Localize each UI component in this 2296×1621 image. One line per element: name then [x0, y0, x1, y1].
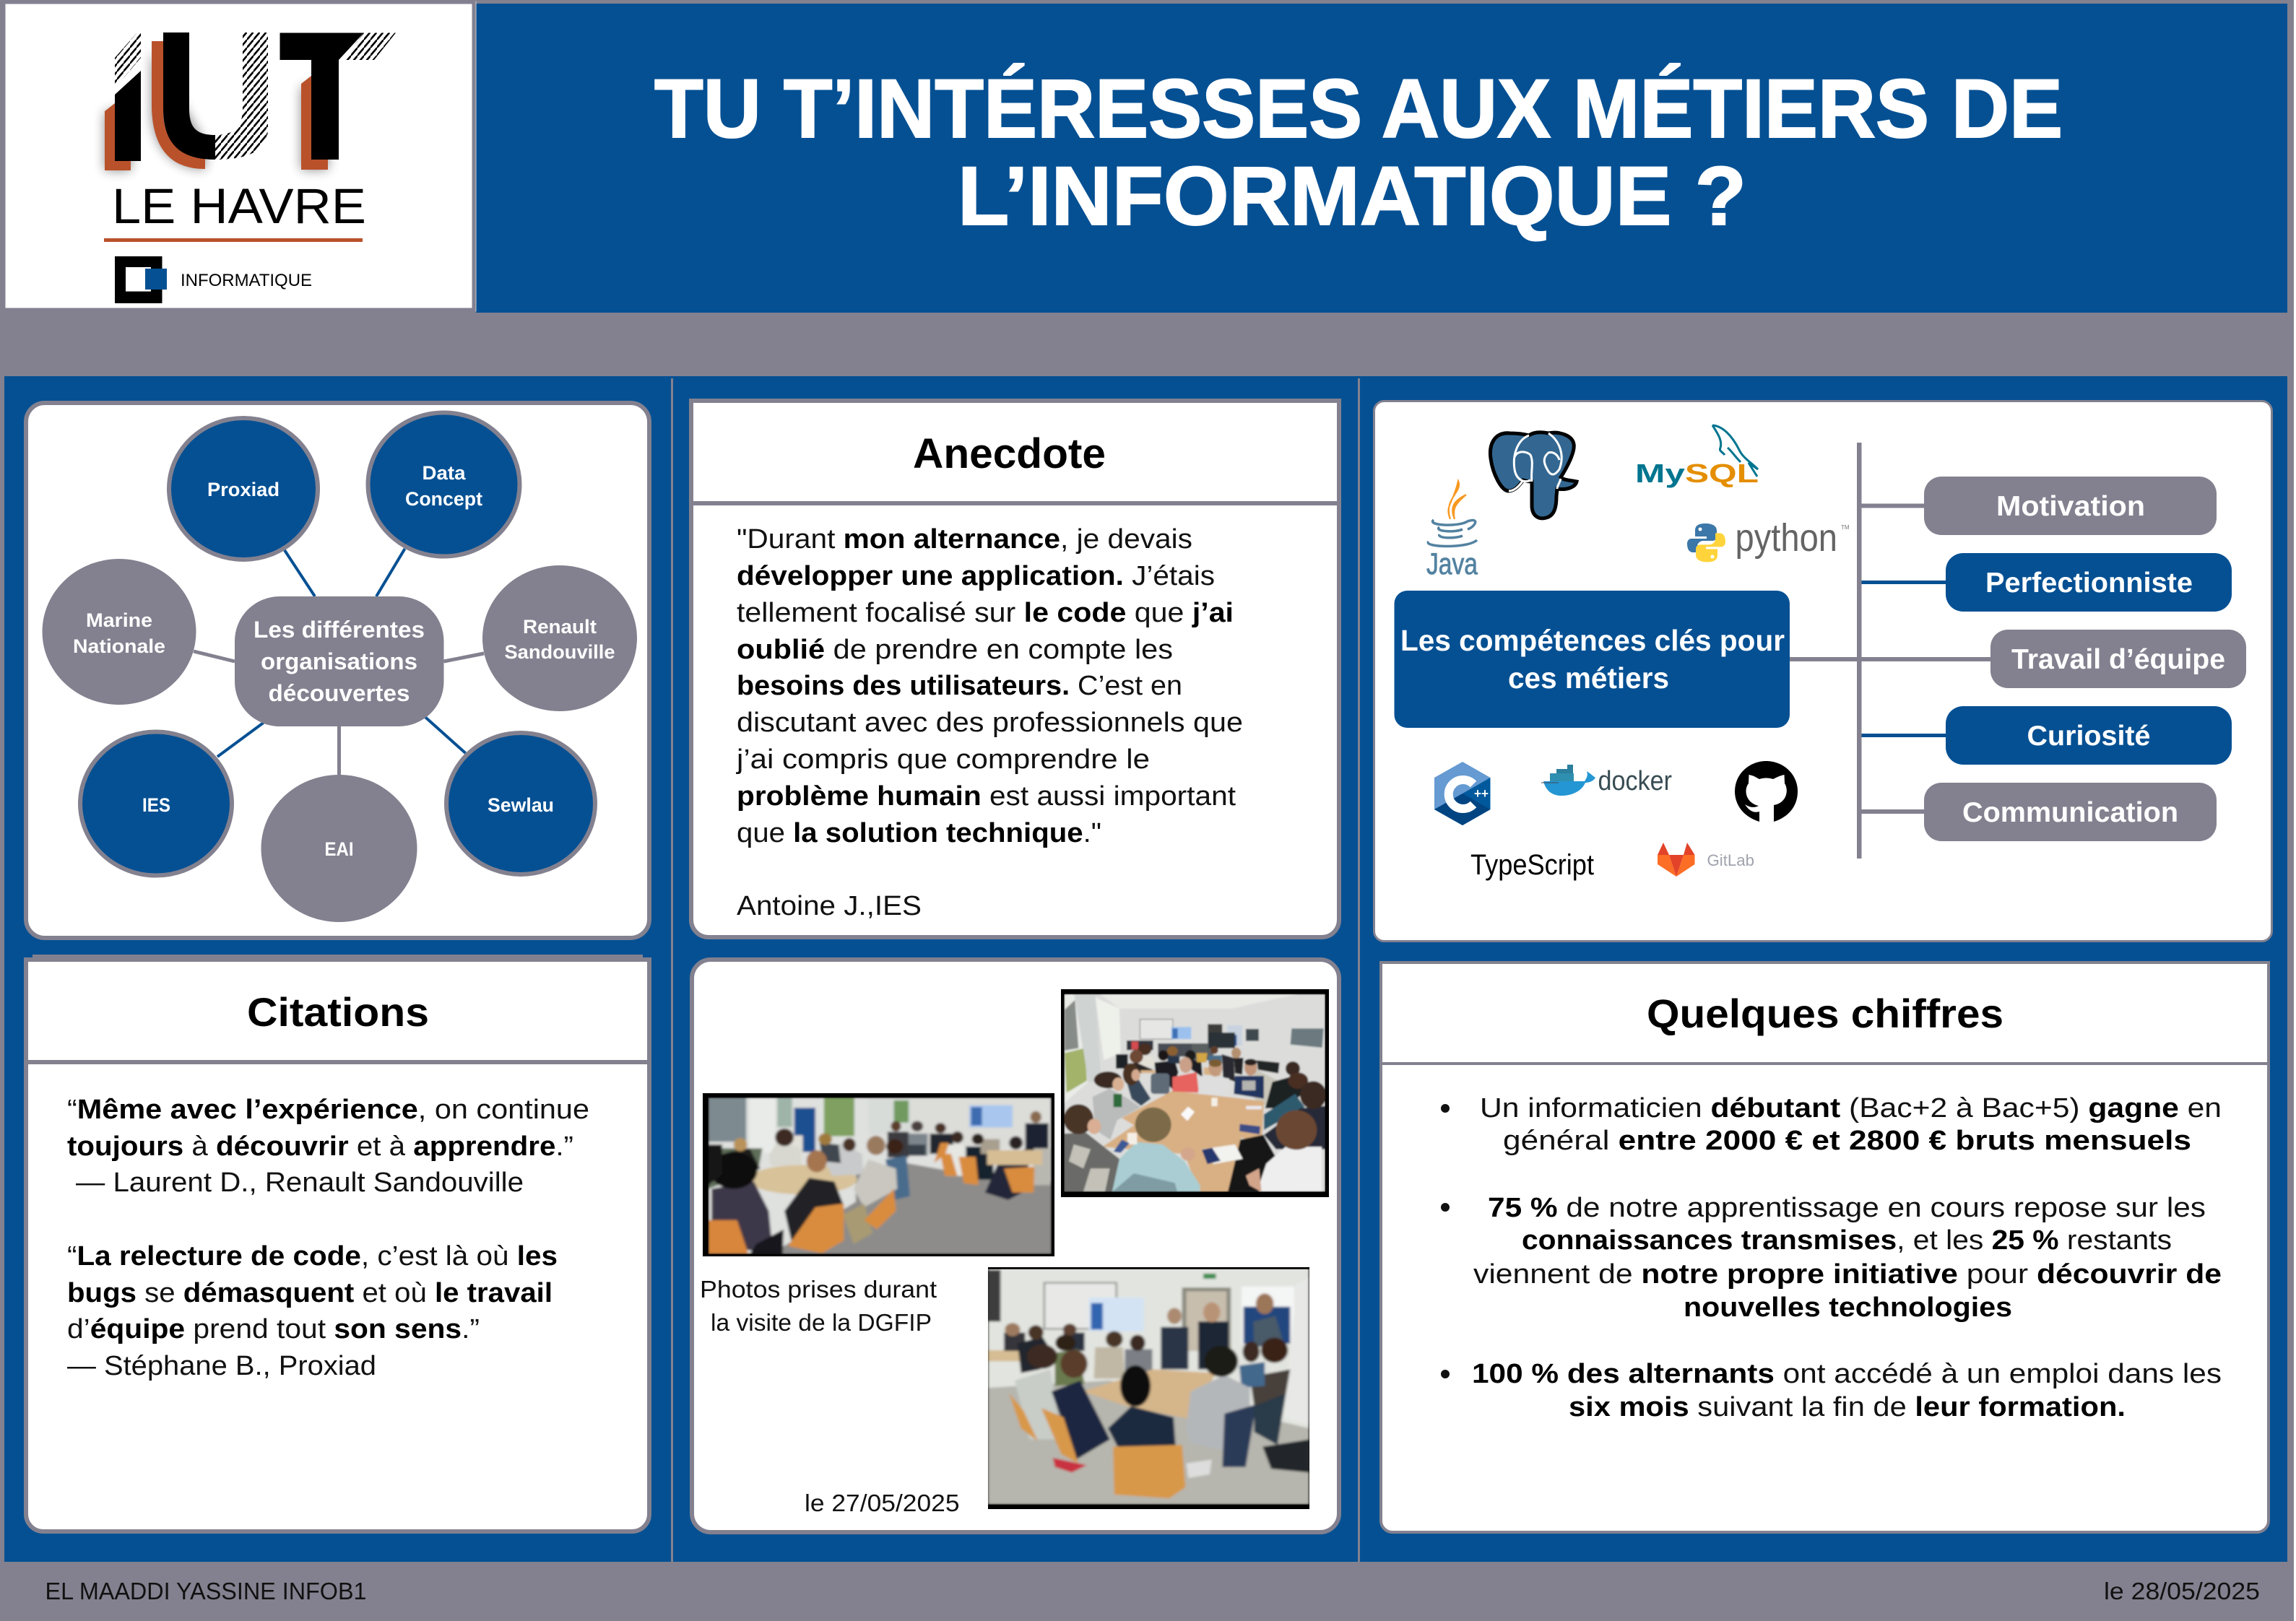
node: Marine Nationale: Nationale	[73, 635, 165, 657]
text: anecdote body	[736, 524, 1243, 921]
node: IES	[80, 732, 232, 875]
icon: typescript: TypeScript	[1470, 849, 1594, 881]
central box	[1394, 591, 1790, 728]
text: quotes: “La relecture de code , c’est là où les	[67, 1241, 558, 1272]
node: center: organisations	[261, 648, 417, 674]
bullet 3	[1441, 1359, 2222, 1422]
logo text: informatique: INFORMATIQUE	[181, 271, 312, 290]
icon: mysql	[1635, 425, 1759, 488]
pill: Communication: Communication	[1962, 797, 2178, 828]
node: Sewlau	[446, 733, 595, 874]
node: EAI: EAI	[325, 838, 354, 860]
pill: Motivation	[1924, 477, 2217, 535]
bullet 1: Un informaticien débutant (Bac+2 à Bac+5) gagne en	[1480, 1093, 2222, 1124]
node: IES: IES	[142, 794, 170, 816]
text: anecdote body: tellement focalisé sur le code que j’ai	[737, 598, 1234, 628]
node: Renault Sandouville: Sandouville	[504, 641, 615, 663]
icon: gitlab: GitLab	[1707, 851, 1754, 869]
node: Marine Nationale: Marine	[86, 609, 152, 631]
text: quotes: toujours à découvrir et à apprendre .”	[67, 1131, 573, 1162]
text: quotes	[67, 1095, 589, 1381]
text: anecdote body: Antoine J.,IES	[737, 891, 922, 921]
pill: Travail d'équipe	[1990, 630, 2246, 688]
panel: anecdote	[691, 401, 1339, 937]
connector tree	[1790, 443, 1990, 859]
central box: Les compétences clés pour	[1400, 624, 1785, 657]
node: center: Les différentes	[254, 617, 425, 643]
text: anecdote body: besoins des utilisateurs. C’est en	[737, 671, 1182, 701]
heading: chiffres: Quelques chiffres	[1647, 991, 2003, 1036]
logo rule	[104, 238, 363, 242]
node: Renault Sandouville: Renault	[523, 616, 597, 638]
icon: python: TM	[1841, 524, 1850, 531]
text: quotes: d’équipe prend tout son sens .”	[67, 1314, 480, 1344]
text: quotes: bugs se démasquent et où le travail	[67, 1278, 553, 1308]
icon: java: Java	[1426, 547, 1478, 581]
heading: citations: Citations	[247, 989, 429, 1035]
icon: mysql: My SQL	[1635, 459, 1759, 488]
seated people	[1127, 1079, 1151, 1106]
text: anecdote body: que la solution technique ."	[737, 818, 1101, 848]
standing men	[1161, 1327, 1188, 1370]
node: center	[235, 596, 443, 726]
node: Marine Nationale	[42, 559, 196, 705]
pill: Curiosité	[1946, 706, 2232, 765]
title	[654, 63, 2063, 243]
panel: organisations	[26, 403, 649, 938]
node: Proxiad	[169, 418, 318, 560]
connector lines	[194, 549, 484, 775]
panel: IUT logo	[2, 1, 476, 311]
text: anecdote body: "Durant mon alternance , je devais	[737, 524, 1192, 555]
icon: java	[1426, 481, 1478, 581]
body background	[4, 376, 2287, 1562]
icon: github	[1735, 761, 1798, 822]
table	[1103, 1091, 1264, 1192]
bullet 2	[1441, 1193, 2222, 1323]
node: center: découvertes	[269, 680, 410, 706]
text: quotes: — Laurent D., Renault Sandouville	[76, 1168, 524, 1198]
panel: photos	[692, 960, 1339, 1532]
seated	[1094, 1347, 1125, 1378]
node: Data Concept: Concept	[405, 488, 482, 510]
text: anecdote body: j’ai compris que comprendre le	[736, 744, 1150, 775]
text: quotes: — Stéphane B., Proxiad	[67, 1351, 376, 1381]
icon: postgresql	[1490, 433, 1577, 518]
central box: ces métiers	[1508, 661, 1669, 695]
icon: python: python	[1735, 516, 1837, 560]
bullet 3: six mois suivant la fin de leur formation.	[1569, 1392, 2126, 1422]
bullet 3: 100 % des alternants ont accédé à un emploi dans les	[1472, 1359, 2222, 1389]
text: anecdote body: développer une application. J’étais	[737, 561, 1215, 591]
caption	[700, 1276, 937, 1336]
brochures	[1202, 1144, 1243, 1164]
icon: gitlab	[1658, 843, 1754, 877]
footer author: EL MAADDI YASSINE INFOB1	[45, 1578, 367, 1604]
logo text: le havre: LE HAVRE	[112, 178, 366, 234]
bullet 1: général entre 2000 € et 2800 € bruts mensuels	[1503, 1126, 2191, 1156]
icon: python	[1687, 516, 1850, 562]
bullet 1	[1441, 1093, 2222, 1156]
pill: Perfectionniste	[1946, 553, 2232, 612]
title: L’INFORMATIQUE ?	[958, 150, 1746, 243]
title: TU T’INTÉRESSES AUX MÉTIERS DE	[654, 63, 2063, 155]
panel: citations	[26, 955, 649, 1531]
node: Data Concept: Data	[422, 462, 466, 484]
back group	[888, 1131, 909, 1157]
date: le 27/05/2025	[805, 1490, 959, 1516]
left table	[748, 1165, 857, 1194]
node: Renault Sandouville	[482, 565, 637, 711]
text: anecdote body: oublié de prendre en compte les	[737, 635, 1173, 665]
logo shadow	[105, 51, 328, 170]
photo: standing group, bottom right	[988, 1267, 1309, 1509]
photo: group at table, top right	[1061, 989, 1329, 1197]
photo: wide room, left	[703, 1093, 1054, 1256]
logo hatched parts	[115, 32, 396, 160]
panel: quelques chiffres	[1381, 962, 2269, 1532]
header banner	[476, 4, 2287, 313]
pill: Travail d'équipe: Travail d’équipe	[2011, 644, 2225, 675]
node: Data Concept	[368, 413, 520, 556]
node: Sewlau: Sewlau	[488, 794, 554, 816]
text: anecdote body: problème humain est aussi important	[737, 781, 1236, 812]
bullet 2: 75 % de notre apprentissage en cours repose sur les	[1488, 1193, 2206, 1223]
pill: Perfectionniste: Perfectionniste	[1985, 568, 2193, 599]
bullet 2: nouvelles technologies	[1684, 1292, 2012, 1323]
text: anecdote body: discutant avec des professionnels que	[737, 708, 1243, 738]
node: Proxiad: Proxiad	[207, 479, 280, 500]
pill: Curiosité: Curiosité	[2027, 721, 2151, 752]
pill: Communication	[1924, 783, 2217, 841]
logo letters black	[115, 32, 364, 161]
panel: skills	[1374, 401, 2272, 942]
bullet 2: connaissances transmises , et les 25 % restants	[1522, 1225, 2172, 1256]
icon: c++	[1434, 762, 1491, 825]
bullet 2: viennent de notre propre initiative pour découvrir de	[1473, 1259, 2222, 1290]
icon: docker	[1541, 765, 1672, 796]
text: quotes: “Même avec l’expérience , on continue	[67, 1095, 589, 1125]
node: EAI	[261, 775, 417, 922]
footer date: le 28/05/2025	[2104, 1578, 2260, 1604]
pill: Motivation: Motivation	[1996, 491, 2145, 522]
icon: docker: docker	[1598, 766, 1672, 796]
icon: department square	[115, 256, 167, 303]
caption: Photos prises durant	[700, 1276, 937, 1303]
back crowd	[1127, 1040, 1153, 1050]
logo letters orange	[105, 41, 328, 170]
icon: c++: ++	[1474, 786, 1489, 801]
heading: anecdote: Anecdote	[913, 430, 1106, 477]
caption: la visite de la DGFIP	[711, 1309, 932, 1336]
